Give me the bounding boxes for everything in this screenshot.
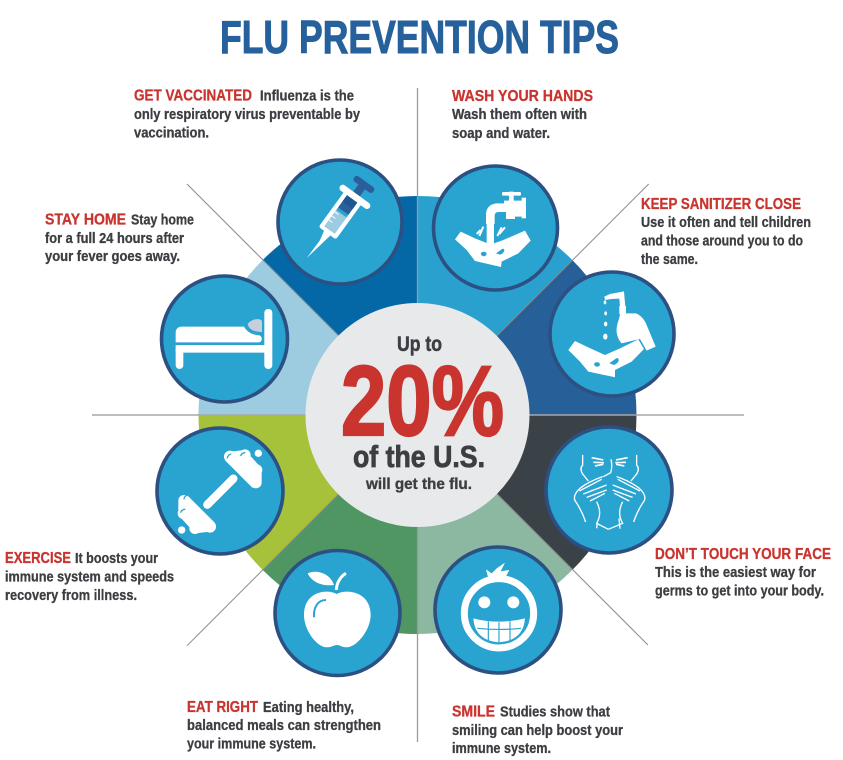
text: get vaccinated [134,88,360,142]
text: smile: smiling can help boost your [452,723,623,739]
icon: covered face [546,427,672,553]
text: exercise: EXERCISE [5,550,71,567]
center circle [306,303,530,527]
text: stay home: STAY HOME [45,212,126,228]
wedge: smile [418,415,572,634]
wedge: stay home [198,260,418,415]
text: eat right [187,699,381,752]
text: smile [452,704,623,757]
text: get vaccinated: only respiratory virus preventable by [134,107,360,123]
text: exercise: It boosts your [75,551,158,567]
icon: syringe [278,160,402,284]
text: exercise [5,550,174,604]
text: keep sanitizer close: KEEP SANITIZER CLOSE [641,196,801,213]
text: stay home: for a full 24 hours after [45,231,184,247]
icon: bed [162,276,288,402]
icon: dumbbell [157,428,283,554]
icon: washing hands [434,166,558,290]
text: don't touch your face [655,546,831,600]
text: wash your hands: WASH YOUR HANDS [452,88,593,105]
will get the flu: will get the flu. [365,476,472,493]
wedge: sanitizer [418,260,636,415]
text: smile: Studies show that [500,704,610,720]
text: get vaccinated: Influenza is the [260,88,354,104]
text: keep sanitizer close: Use it often and tell children [641,215,811,231]
text: eat right: Eating healthy, [263,700,354,716]
20 percent: 20% [341,345,504,456]
title: FLU PREVENTION TIPS [220,11,619,63]
text: get vaccinated: GET VACCINATED [134,88,252,104]
icon: apple [275,550,400,676]
text: smile: SMILE [452,704,495,720]
text: wash your hands: soap and water. [452,126,550,142]
text: exercise: recovery from illness. [5,588,137,604]
text: keep sanitizer close [641,196,811,268]
wedge: wash [418,196,572,415]
wedge: vaccinate [263,196,418,415]
text: smile: immune system. [452,741,551,757]
text: wash your hands [452,88,593,142]
of the U.S.: of the U.S. [353,439,485,474]
text: stay home [45,212,194,265]
text: exercise: immune system and speeds [5,570,174,586]
text: get vaccinated: vaccination. [134,126,209,142]
text: eat right: balanced meals can strengthen [187,718,381,734]
text: keep sanitizer close: and those around you to do [641,234,803,250]
text: stay home: your fever goes away. [45,249,180,265]
icon: sanitizer [550,272,674,396]
wedge: eat [263,415,418,634]
icon: smile [435,547,561,673]
text: don't touch your face: This is the easiest way for [655,565,816,581]
text: stay home: Stay home [131,212,194,228]
text: eat right: your immune system. [187,736,316,752]
wedge: exercise [198,415,418,570]
wedge: face [418,415,637,570]
text: keep sanitizer close: the same. [641,252,698,268]
ring of coloured wedges [198,196,637,634]
text: eat right: EAT RIGHT [187,699,258,716]
up to: Up to [397,333,442,356]
text: wash your hands: Wash them often with [452,107,587,123]
